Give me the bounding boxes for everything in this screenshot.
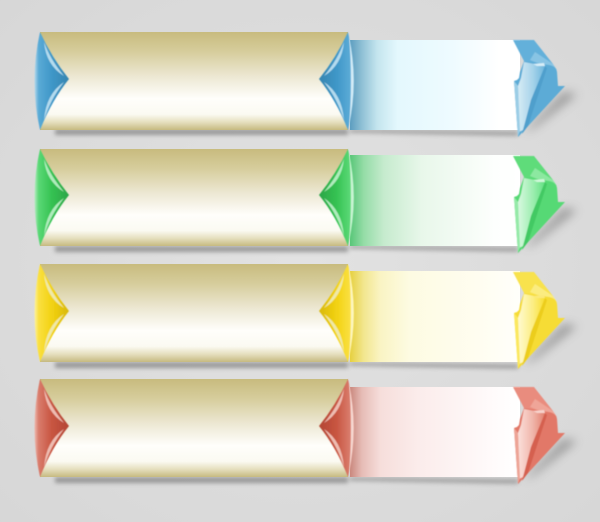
shadows [55, 439, 577, 484]
right strip [350, 387, 520, 477]
row 3: yellow banner [34, 264, 577, 369]
left wedge [34, 149, 69, 246]
arrow [513, 272, 565, 369]
main panel [40, 264, 348, 362]
arrow [513, 387, 565, 484]
main panel [40, 32, 348, 130]
left wedge [34, 264, 69, 362]
shadows [55, 208, 577, 252]
right strip [350, 40, 520, 130]
shadows [55, 92, 577, 136]
arrow [513, 40, 565, 137]
main panel [40, 149, 348, 246]
right wedge [319, 32, 354, 130]
main panel [40, 379, 348, 477]
arrow [513, 156, 565, 253]
row 4: red banner [34, 379, 577, 484]
right wedge [319, 149, 354, 246]
left wedge [34, 32, 69, 130]
right wedge [319, 379, 354, 477]
shadows [55, 324, 577, 369]
right strip [350, 155, 520, 246]
left wedge [34, 379, 69, 477]
row 1: blue banner [34, 32, 577, 137]
right strip [350, 271, 520, 362]
row 2: green banner [34, 149, 577, 253]
right wedge [319, 264, 354, 362]
